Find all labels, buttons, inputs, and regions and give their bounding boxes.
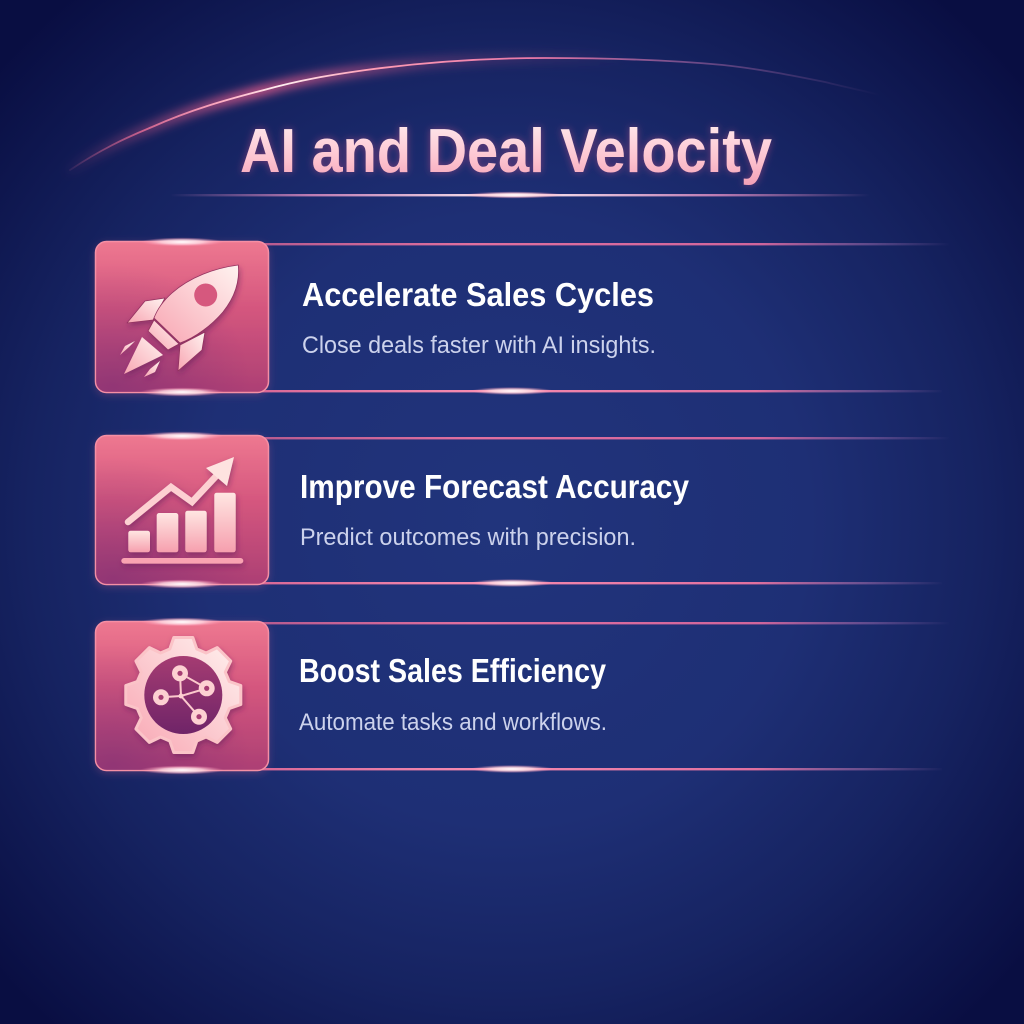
icon: rising bar chart xyxy=(121,457,243,564)
panel: improve forecast accuracy xyxy=(96,432,950,588)
heading: Improve Forecast Accuracy xyxy=(300,468,690,505)
top accent line xyxy=(262,622,950,624)
icon: gear with network xyxy=(126,638,241,752)
icon card xyxy=(96,618,268,774)
icon: rocket xyxy=(120,265,239,377)
title: AI and Deal Velocity xyxy=(240,117,772,186)
heading: Accelerate Sales Cycles xyxy=(302,276,654,313)
decorative glowing arc xyxy=(70,58,880,170)
bottom accent line xyxy=(262,765,942,773)
top accent line xyxy=(262,437,950,439)
icon card xyxy=(96,432,268,588)
bottom accent line xyxy=(262,579,942,587)
description: Predict outcomes with precision. xyxy=(300,524,636,551)
description: Close deals faster with AI insights. xyxy=(302,332,656,359)
panel: accelerate sales cycles xyxy=(96,238,950,396)
icon card xyxy=(96,238,268,396)
panel: boost sales efficiency xyxy=(96,618,950,774)
title underline xyxy=(170,192,870,198)
bottom accent line xyxy=(262,387,942,395)
top accent line xyxy=(262,243,950,245)
heading: Boost Sales Efficiency xyxy=(299,652,607,689)
description: Automate tasks and workflows. xyxy=(299,709,607,736)
